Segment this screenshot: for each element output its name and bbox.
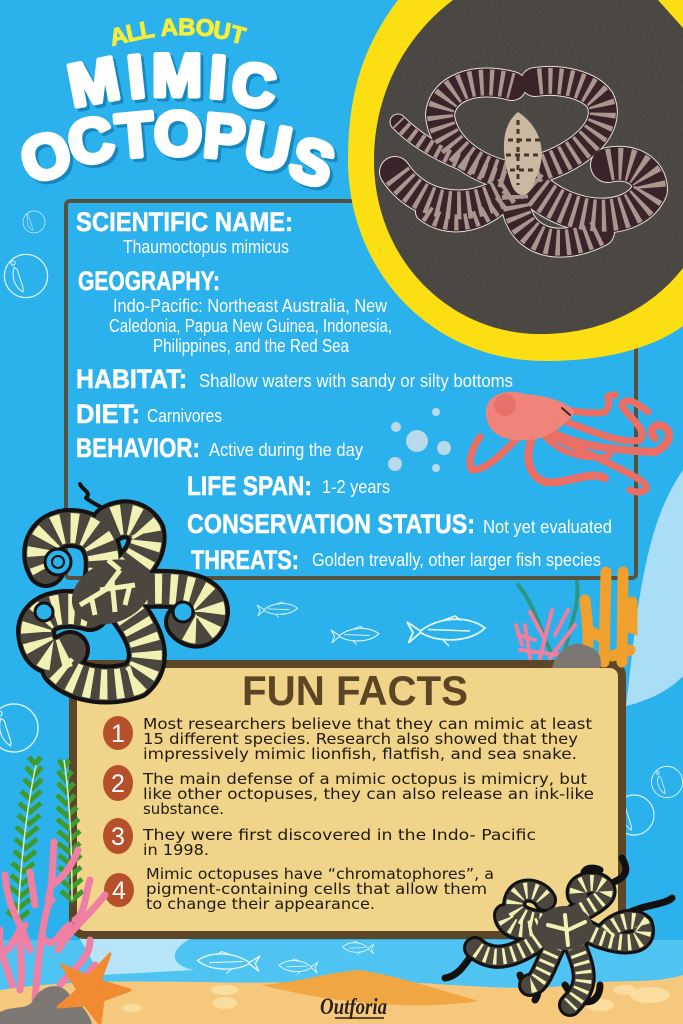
habitat: Shallow waters with sandy or silty bottoms [199, 371, 513, 391]
yellow photo frame [348, 0, 683, 361]
behavior: Active during the day [209, 440, 363, 460]
fact 2: substance. [143, 800, 224, 818]
fact 4: 4 [112, 877, 126, 905]
life span: LIFE SPAN: [187, 471, 312, 501]
threats [191, 545, 601, 575]
habitat: HABITAT: [76, 364, 187, 394]
lower water band [0, 940, 683, 1024]
title: mimic: MIMIC [63, 42, 280, 121]
panel: fun facts [73, 664, 622, 935]
panel card [73, 664, 622, 935]
habitat [76, 364, 513, 394]
geography: Indo-Pacific: Northeast Australia, New [113, 296, 388, 316]
fact 1: Most researchers believe that they can mimic at least [143, 715, 592, 733]
icon: grey rocks [0, 986, 92, 1024]
icon: pink coral [0, 842, 105, 1000]
fish outlines [257, 602, 485, 646]
fact 2: 2 [111, 770, 125, 798]
fact 3: They were first discovered in the Indo- Pacific [142, 826, 536, 844]
fact 4: to change their appearance. [146, 895, 375, 913]
fact 3 [103, 818, 536, 859]
sand floor [0, 970, 683, 1024]
scientific name [76, 207, 293, 257]
photo octopus arms [395, 81, 650, 243]
fact 3: 3 [111, 823, 125, 851]
geography: GEOGRAPHY: [78, 266, 220, 296]
icon: red octopus [470, 392, 669, 492]
behavior: BEHAVIOR: [76, 433, 200, 463]
fact 1: impressively mimic lionfish, flatfish, and sea snake. [143, 745, 577, 763]
scientific name: Thaumoctopus mimicus [123, 237, 289, 257]
diet: Carnivores [147, 406, 222, 426]
icon: reef with orange coral [516, 572, 632, 668]
panel: species facts [66, 201, 636, 578]
photo octopus mantle [504, 112, 542, 195]
icon: large cartoon octopus [35, 484, 210, 684]
geography [78, 266, 392, 356]
geography: Caledonia, Papua New Guinea, Indonesia, [109, 316, 392, 336]
light blue wave right [626, 470, 683, 706]
icon: seaweed [7, 757, 83, 920]
fact 1: 1 [111, 720, 125, 748]
conservation status: Not yet evaluated [483, 517, 612, 537]
fact 2: like other octopuses, they can also release an ink-like [143, 785, 594, 803]
darker dune [261, 970, 479, 1005]
fact 4: Mimic octopuses have “chromatophores”, a [146, 865, 494, 883]
diet: DIET: [76, 399, 140, 429]
title: all about: ALLABOUT [107, 14, 249, 52]
diet [76, 399, 222, 429]
icon: small cartoon octopus [445, 858, 672, 1005]
fact 4 [104, 865, 494, 913]
behavior [76, 433, 363, 463]
fact 2 [103, 765, 594, 818]
icon: starfish [58, 954, 130, 1024]
fact 4: pigment-containing cells that allow them [146, 880, 487, 898]
geography: Philippines, and the Red Sea [153, 336, 350, 356]
pale wave near bottom [78, 935, 200, 975]
panel border [66, 201, 636, 578]
fact 2: The main defense of a mimic octopus is mimicry, but [142, 770, 587, 788]
fact 1: 15 different species. Research also showed that they [143, 730, 578, 748]
threats: Golden trevally, other larger fish species [312, 550, 601, 570]
conservation status: CONSERVATION STATUS: [187, 509, 475, 539]
photo: mimic octopus on sand [370, 0, 683, 340]
title: octopus: OCTOPUS [13, 100, 342, 202]
scientific name: SCIENTIFIC NAME: [76, 207, 293, 237]
lower fish outlines [198, 941, 374, 975]
life span: 1-2 years [322, 477, 390, 497]
fact 1 [103, 715, 592, 763]
logo: outforia: Outforia [320, 994, 387, 1019]
floating bubbles [388, 408, 451, 472]
heading: fun facts: FUN FACTS [242, 667, 468, 714]
threats: THREATS: [191, 545, 299, 575]
background bubbles [0, 211, 683, 835]
fact 3: in 1998. [143, 841, 209, 859]
